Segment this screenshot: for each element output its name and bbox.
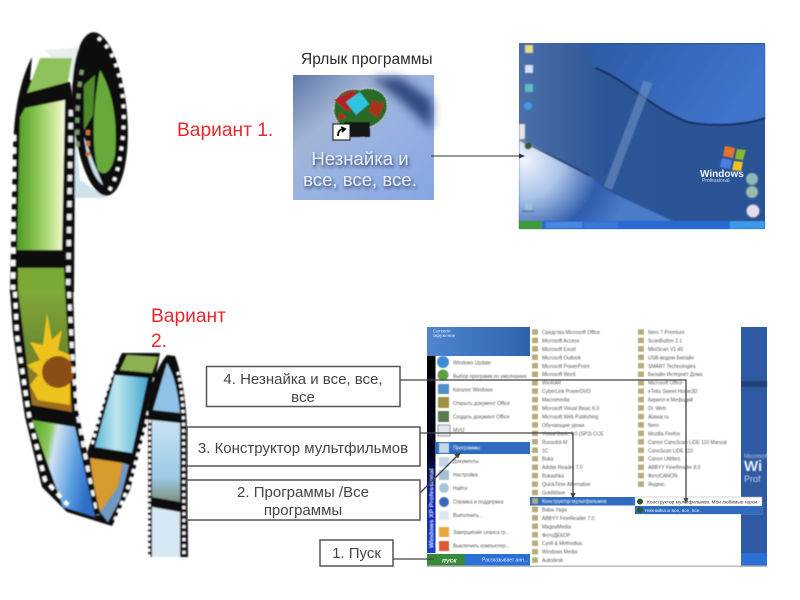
shortcut caption: все, все, все. <box>303 169 417 190</box>
folders submenu items <box>648 330 727 488</box>
folders submenu items: Canon Utilities <box>648 457 681 463</box>
start menu screenshot <box>427 327 769 567</box>
program flyout: Незнайка и все, все, все. <box>645 507 701 514</box>
programs submenu items: Microsoft Excel <box>542 347 576 353</box>
folders submenu <box>635 327 741 566</box>
film reel: upper section <box>10 30 134 292</box>
heading: program shortcut: Ярлык программы <box>301 51 433 68</box>
callout box 4: все <box>291 389 315 406</box>
programs submenu items: Russobit-M <box>542 440 567 446</box>
programs submenu items: QuickTime Alternative <box>542 482 591 488</box>
folders submenu items: eTeks Sweet Home3D <box>648 389 698 395</box>
folders submenu items: ABBYY FineReader 8.0 <box>648 465 701 471</box>
selected item: cartoon maker <box>530 497 635 506</box>
folders submenu items: Nero <box>648 423 659 429</box>
programs submenu items: CyberLink PowerDVD <box>542 389 591 395</box>
desktop icons <box>525 45 533 53</box>
start menu screenshot: Рассказывает анн... <box>482 558 528 564</box>
start menu items: Открыть документ Office <box>453 401 510 407</box>
programs submenu items: Autodesk <box>542 558 563 564</box>
reel inner picture <box>94 70 116 173</box>
pale frame <box>152 420 180 502</box>
heading: variant 1: Вариант 1. <box>177 120 273 141</box>
film strip body <box>10 57 75 292</box>
programs submenu items <box>542 330 607 564</box>
wave shadow line <box>595 68 765 125</box>
programs submenu items: ФотоДЕКОР <box>542 533 571 539</box>
start menu items: Выключить компьютер... <box>453 544 510 550</box>
ripple frame <box>153 363 180 413</box>
start menu items: Завершение сеанса гр... <box>453 530 510 536</box>
start menu items: Найти <box>453 485 467 492</box>
callout box 2: программы <box>264 502 342 519</box>
perforations second leg <box>92 360 117 445</box>
wallpaper caption: Microsoft <box>744 454 769 460</box>
start menu item icons <box>437 356 450 551</box>
arrow: step 4 <box>400 380 688 504</box>
programs submenu items: MagnaMedia <box>542 524 571 530</box>
lower-left glow <box>519 138 675 222</box>
folders submenu items: Mozilla Firefox <box>648 431 681 437</box>
perforations third leg <box>149 420 150 557</box>
bubble frame <box>152 507 180 557</box>
programs submenu <box>530 327 635 566</box>
callout box 3 <box>187 427 420 466</box>
programs submenu items: Средства Microsoft Office <box>542 330 600 336</box>
strip second leg body <box>87 353 160 526</box>
wallpaper caption: Wi <box>744 458 762 475</box>
start menu items: Каталог Windows <box>453 388 493 394</box>
long green frame <box>17 100 65 250</box>
folders submenu items: Яндекс <box>648 482 665 488</box>
strip third leg body <box>148 355 188 557</box>
programs submenu items: Обучающие уроки <box>542 423 585 429</box>
windows logo text: Windows <box>700 169 744 180</box>
programs submenu items: Baba-Yaga <box>542 507 567 513</box>
start menu side band <box>427 356 436 554</box>
callout box 2 <box>187 480 420 520</box>
sunflower frame <box>18 290 72 412</box>
pale sky behind reel <box>45 47 85 85</box>
callout box 1: 1. Пуск <box>332 545 381 562</box>
sky frame <box>32 420 95 517</box>
programs submenu items: Buka <box>542 457 554 463</box>
folders submenu items: Dr. Web <box>648 406 666 412</box>
reel ring <box>66 30 134 198</box>
folders submenu items: ФотоCANON <box>648 474 678 480</box>
programs submenu items: Adobe Reader 7.0 <box>542 465 583 471</box>
start menu header <box>427 327 530 356</box>
heading: variant 2: 2. <box>151 331 167 352</box>
programs submenu items: Microsoft PowerPoint <box>542 364 590 370</box>
arrow: step 1 <box>393 558 434 560</box>
shortcut icon panel <box>293 75 434 200</box>
film reel: lower section <box>10 290 188 557</box>
start menu items: Настройка <box>453 472 478 478</box>
start menu screenshot: Сетевое <box>433 328 451 334</box>
wallpaper caption <box>744 454 769 484</box>
start menu body <box>435 356 530 554</box>
top green frame <box>27 58 72 93</box>
windows flag logo <box>720 146 746 171</box>
start menu items: Создать документ Office <box>453 414 510 420</box>
programs submenu items: Microsoft Outlook <box>542 355 581 361</box>
programs submenu items: Cyrill & Methodius <box>542 541 583 547</box>
programs submenu items: Microsoft Visual Basic 6.0 <box>542 406 599 412</box>
perforations first leg <box>15 292 68 505</box>
shortcut caption: Незнайка и <box>311 148 409 169</box>
folders submenu items: Кирилл и Мефодий <box>648 397 693 404</box>
icon: shortcut arrow <box>333 124 350 140</box>
programs submenu items: WinRAR <box>542 381 562 387</box>
folders submenu folder icons <box>638 332 644 484</box>
blue frame <box>95 375 148 453</box>
programs submenu items: Microsoft Web Publishing <box>542 414 599 420</box>
programs submenu items: Конструктор мультфильмов <box>542 499 607 505</box>
strip first leg body <box>10 290 112 526</box>
programs submenu items: 1C <box>542 448 549 454</box>
callout box 1 <box>320 540 393 566</box>
start menu items: Программы <box>453 446 480 452</box>
folders submenu items: Alawar.ru <box>648 414 669 420</box>
shortcut caption <box>303 148 417 190</box>
start menu screenshot: Windows XP Professional <box>428 468 436 548</box>
callout box 4 <box>206 366 400 406</box>
folders submenu items: Nero 7 Premium <box>648 330 684 336</box>
programs submenu items: Windows Media <box>542 550 578 556</box>
program flyout <box>635 497 762 514</box>
wallpaper sliver <box>741 327 767 567</box>
perforations right <box>68 110 71 292</box>
programs submenu items: Microsoft Access <box>542 338 580 344</box>
folders submenu items: Canon CanoScan LiDE 110 Manual <box>648 440 727 446</box>
start menu items <box>453 360 527 550</box>
sunflower <box>27 313 70 405</box>
callout box 4: 4. Незнайка и все, все, <box>223 371 383 388</box>
programs submenu folder icons <box>532 332 538 560</box>
arrow: shortcut to desktop <box>431 154 525 158</box>
arrow: step 3 <box>420 433 576 499</box>
start menu items: MVI2 <box>453 428 465 434</box>
photo bottom edge <box>427 566 767 567</box>
green top frame <box>120 355 158 373</box>
start menu items: Выполнить... <box>453 513 483 519</box>
selected item: programs <box>435 442 530 454</box>
callout box 2: 2. Программы /Все <box>237 484 369 501</box>
start button: пуск <box>442 558 457 564</box>
wallpaper caption: Prof <box>744 474 761 484</box>
start menu screenshot: окружение <box>433 333 456 338</box>
taskbar <box>427 553 741 565</box>
callout box 3: 3. Конструктор мультфильмов <box>198 440 408 457</box>
programs submenu items: Microsoft Word <box>542 372 576 378</box>
desktop screenshot <box>519 43 765 229</box>
folders submenu items: USB-модем Билайн <box>648 354 694 361</box>
folders submenu items: Microsoft Office <box>648 381 683 387</box>
heading: variant 2 <box>151 306 226 352</box>
lower green frame <box>18 268 65 292</box>
orange frame <box>90 458 123 512</box>
start menu items: Выбор программ по умолчанию <box>453 374 527 380</box>
upper wave <box>580 44 765 124</box>
icon: program emblem <box>334 88 387 137</box>
desktop taskbar <box>519 221 765 229</box>
reel holes <box>98 38 124 192</box>
perforations left <box>13 135 14 292</box>
folders submenu items: MiniScan V1.40 <box>648 347 683 353</box>
heading: variant 2: Вариант <box>151 306 226 327</box>
folders submenu items: Билайн Интернет Дома <box>648 371 703 378</box>
programs submenu items: ABBYY FineReader 7.0 <box>542 516 595 522</box>
folders submenu items: SMART Technologies <box>648 364 696 370</box>
programs submenu items: GoldWave <box>542 490 565 496</box>
start menu items: Windows Update <box>453 360 491 366</box>
start menu items: Документы <box>453 459 479 465</box>
program flyout: Конструктор мультфильмов. Мои любимые герои <box>647 500 757 506</box>
folders submenu items: ScanButton 2.1 <box>648 338 682 344</box>
programs submenu items: Bukashka <box>542 474 564 480</box>
start menu items: Справка и поддержка <box>453 500 504 506</box>
windows logo text: Professional <box>702 178 730 184</box>
vertical light band <box>608 82 648 188</box>
start button <box>427 554 465 566</box>
programs submenu items: Visual Basic 6.0 (SP3) CCE <box>542 431 604 437</box>
folders submenu items: CanoScan LiDE 110 <box>648 448 693 454</box>
desktop gadgets <box>746 173 758 185</box>
arrow: step 2 <box>420 452 461 493</box>
programs submenu items: Macromedia <box>542 398 570 404</box>
